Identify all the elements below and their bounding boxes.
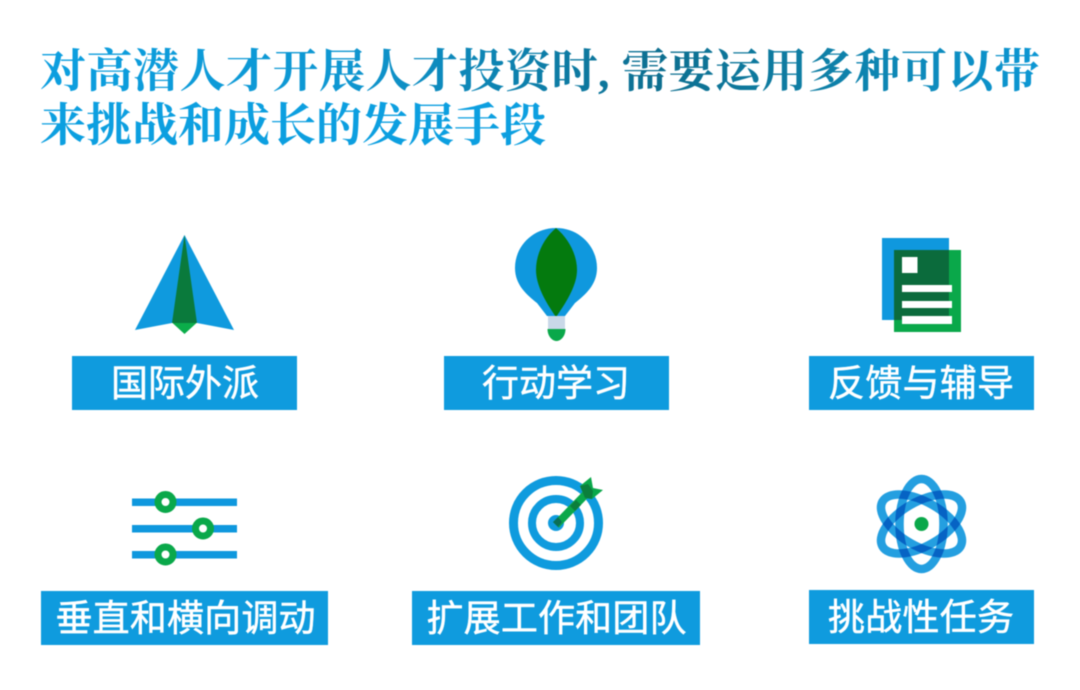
label: 行动学习: 行动学习	[482, 363, 630, 404]
label: 行动学习	[444, 356, 669, 410]
label: 扩展工作和团队: 扩展工作和团队	[426, 598, 686, 639]
label: 反馈与辅导: 反馈与辅导	[828, 363, 1014, 404]
title	[40, 46, 1040, 151]
icon: paper plane	[135, 235, 234, 334]
label: 扩展工作和团队	[412, 591, 700, 645]
icon: atom	[872, 479, 971, 569]
icon: target with arrow	[514, 477, 603, 566]
label: 国际外派: 国际外派	[111, 363, 259, 404]
label: 垂直和横向调动	[41, 591, 328, 645]
title: 对高潜人才开展人才投资时, 需要运用多种可以带	[40, 46, 1040, 97]
label: 垂直和横向调动: 垂直和横向调动	[56, 598, 316, 639]
icon: document	[882, 238, 961, 332]
label: 挑战性任务: 挑战性任务	[828, 597, 1014, 638]
label: 反馈与辅导	[809, 356, 1034, 410]
icon: hot air balloon	[515, 228, 597, 341]
title: 来挑战和成长的发展手段	[40, 100, 546, 151]
label: 国际外派	[72, 356, 297, 410]
icon: sliders	[132, 494, 237, 562]
label: 挑战性任务	[809, 590, 1034, 644]
